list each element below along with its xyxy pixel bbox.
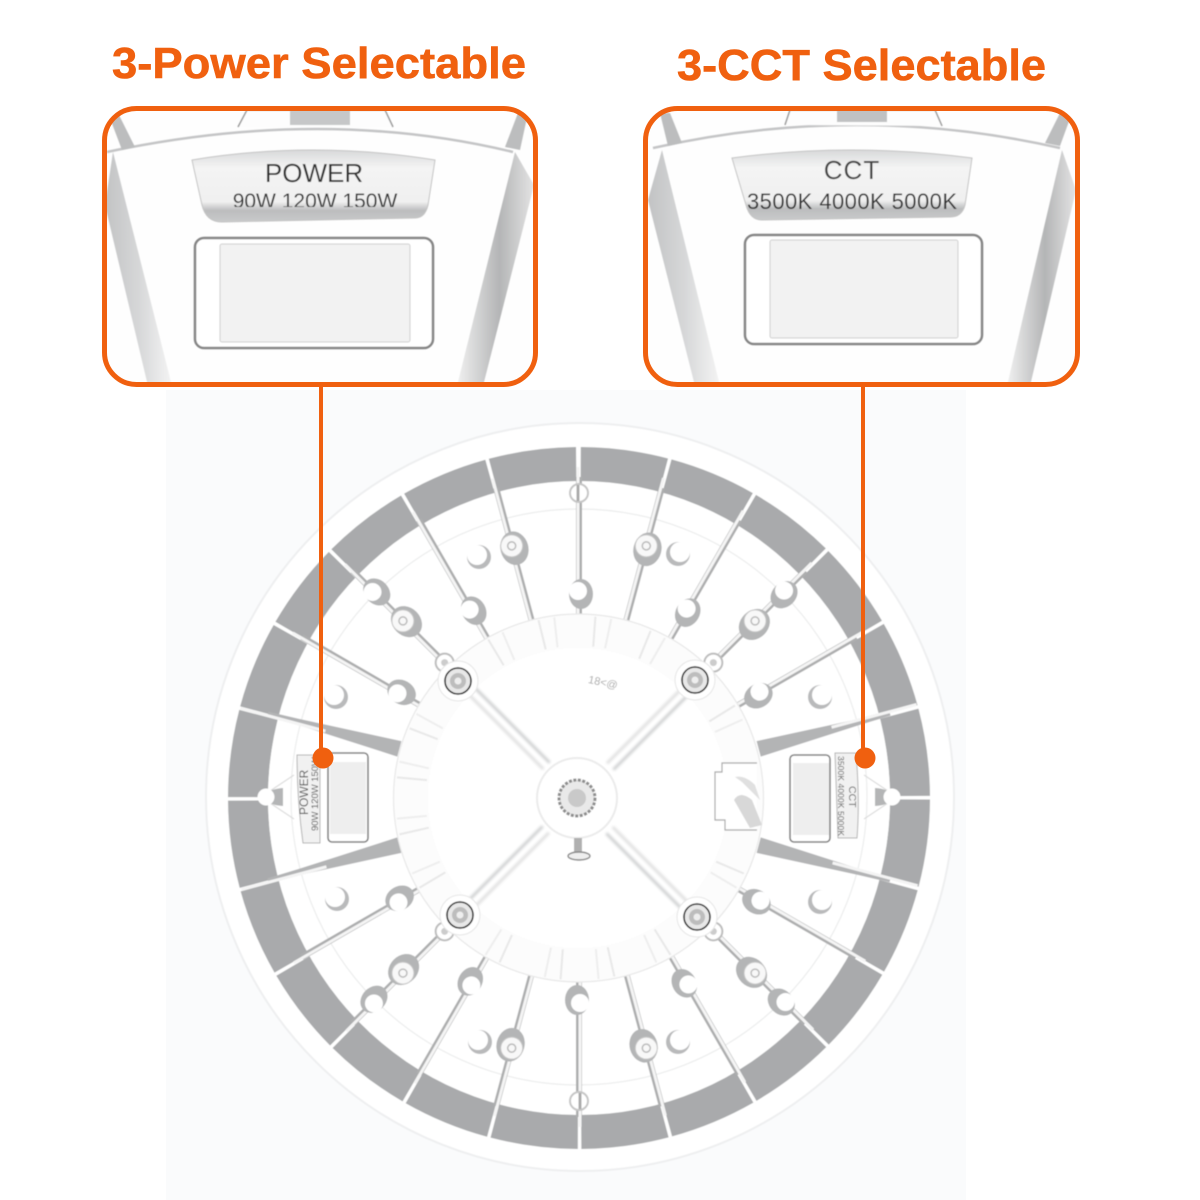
left switch plate: 90W 120W 150W (310, 757, 321, 831)
inner face of lamp (268, 481, 890, 1115)
callout: power switch close-up (104, 108, 536, 386)
colour temperature options: 3500K 4000K 5000K (747, 189, 957, 214)
central hub (394, 614, 764, 982)
right strut (1007, 150, 1076, 386)
inner panel outline (291, 509, 867, 1085)
switch window (195, 238, 433, 348)
left switch plate: POWER (297, 769, 311, 815)
outer rim disc (206, 423, 954, 1171)
centre boss and screw (537, 758, 617, 838)
spokes (239, 467, 919, 1127)
photo backdrop (166, 390, 966, 1200)
embossed marks on hub: 18<@ (587, 674, 619, 692)
hub bolts (438, 660, 717, 937)
leader line: CCT (854, 386, 876, 768)
callout frame (646, 108, 1078, 384)
right switch window (790, 755, 830, 842)
right switch plate: 3500K 4000K 5000K (836, 756, 846, 836)
lamp underside photo (206, 423, 954, 1171)
title: 3-CCT Selectable: 3-CCT Selectable (677, 41, 1046, 90)
left switch window (328, 753, 368, 842)
right switch plate (790, 753, 858, 842)
upper bracket arc (653, 125, 1060, 148)
right strut (457, 152, 534, 386)
mount above arc (238, 110, 393, 127)
slider face (220, 244, 410, 342)
small rivet (568, 838, 590, 860)
right switch plate: CCT (846, 786, 858, 808)
callout frame (104, 108, 536, 384)
power label plate (192, 150, 435, 222)
callout: CCT switch close-up (645, 108, 1078, 386)
title: 3-Power Selectable: 3-Power Selectable (112, 39, 526, 88)
leader line: power (312, 386, 334, 768)
wattage options: 90W 120W 150W (233, 190, 397, 213)
POWER label text: POWER (265, 158, 363, 188)
corner tubes (108, 113, 528, 150)
mounting studs (324, 542, 832, 1054)
switch window (745, 235, 982, 344)
cable cut-out (715, 763, 762, 830)
upper bracket arc (107, 129, 513, 152)
CCT label plate (732, 150, 972, 220)
mount above arc (785, 110, 942, 126)
CCT label text: CCT (824, 155, 880, 185)
left strut (105, 152, 172, 386)
slider face (770, 240, 958, 338)
left switch plate (297, 753, 368, 843)
corner tubes (660, 113, 1072, 146)
left strut (648, 150, 720, 386)
segmented grey ring (248, 467, 910, 1129)
